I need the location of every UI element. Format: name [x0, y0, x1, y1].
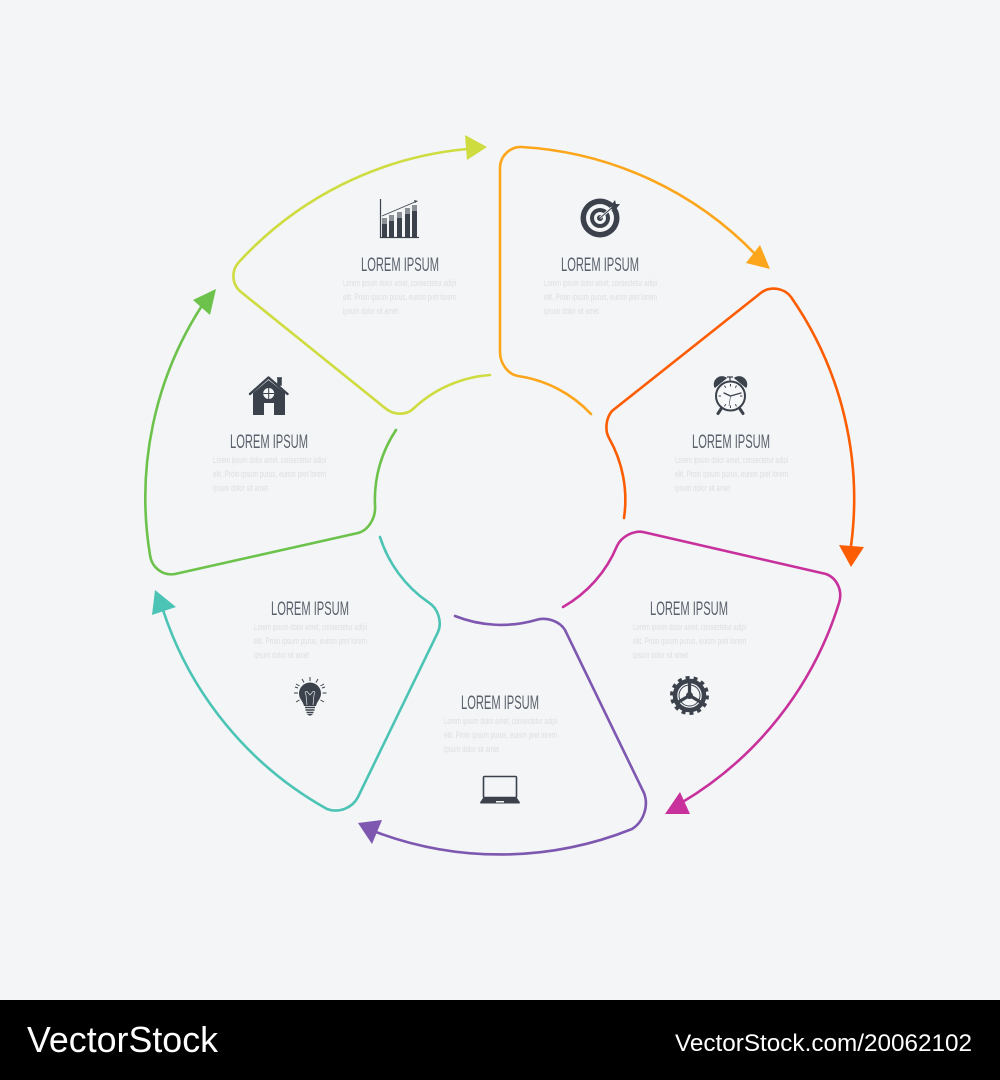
text block: purple: elit. Proin ipsum purus, euism pret lorem: [444, 730, 557, 741]
purple outline arrow: [376, 616, 646, 854]
text block: magenta: [633, 622, 746, 661]
panel: lime segment: [233, 135, 490, 414]
heading: orange: LOREM IPSUM: [561, 254, 639, 276]
text block: orange: ipsum dolor sit amet: [544, 306, 599, 317]
icon: alarm clock: [715, 377, 746, 414]
text block: teal: elit. Proin ipsum purus, euism pret lorem: [254, 636, 367, 647]
green arrowhead: [193, 289, 216, 315]
teal arrowhead: [152, 590, 176, 615]
panel: purple segment: [358, 616, 646, 854]
text block: lime: [343, 278, 456, 317]
panel: dark orange segment: [606, 289, 864, 567]
icon: target: [580, 198, 620, 238]
heading: lime: LOREM IPSUM: [361, 254, 439, 276]
panel: green segment: [145, 289, 396, 574]
icon: house: [250, 378, 288, 415]
icon: bar chart: [380, 199, 419, 238]
text block: green: [213, 455, 326, 494]
text block: magenta: elit. Proin ipsum purus, euism pret lorem: [633, 636, 746, 647]
dark orange outline arrow: [606, 289, 854, 546]
heading: green: LOREM IPSUM: [230, 431, 308, 453]
lime arrowhead: [465, 135, 487, 160]
heading: magenta: LOREM IPSUM: [650, 598, 728, 620]
heading: dark orange: LOREM IPSUM: [692, 431, 770, 453]
text block: purple: [444, 716, 557, 755]
text block: orange: Lorem ipsum dolor amet, consectetur adipi: [544, 278, 657, 289]
text block: green: elit. Proin ipsum purus, euism pret lorem: [213, 469, 326, 480]
watermark url text: VectorStock.com/20062102: [675, 1030, 972, 1057]
magenta outline arrow: [563, 532, 840, 803]
text block: purple: Lorem ipsum dolor amet, consectetur adipi: [444, 716, 557, 727]
text block: dark orange: ipsum dolor sit amet: [675, 483, 730, 494]
text block: lime: elit. Proin ipsum purus, euism pret lorem: [343, 292, 456, 303]
green outline arrow: [145, 304, 396, 574]
panel: teal segment: [152, 537, 440, 811]
lime outline arrow: [233, 149, 490, 414]
text block: lime: Lorem ipsum dolor amet, consectetur adipi: [343, 278, 456, 289]
text block: magenta: Lorem ipsum dolor amet, consectetur adipi: [633, 622, 746, 633]
icon: gear: [672, 678, 707, 713]
orange outline arrow: [500, 147, 757, 414]
orange arrowhead: [746, 245, 770, 269]
text block: lime: ipsum dolor sit amet: [343, 306, 398, 317]
text block: teal: [254, 622, 367, 661]
heading: purple: LOREM IPSUM: [461, 692, 539, 714]
icon: laptop: [480, 776, 520, 804]
text block: dark orange: [675, 455, 788, 494]
panel: orange segment: [500, 147, 770, 414]
text block: green: ipsum dolor sit amet: [213, 483, 268, 494]
text block: magenta: ipsum dolor sit amet: [633, 650, 688, 661]
text block: orange: [544, 278, 657, 317]
purple arrowhead: [358, 820, 382, 844]
text block: purple: ipsum dolor sit amet: [444, 744, 499, 755]
heading: teal: LOREM IPSUM: [271, 598, 349, 620]
text block: green: Lorem ipsum dolor amet, consectetur adipi: [213, 455, 326, 466]
text block: teal: Lorem ipsum dolor amet, consectetur adipi: [254, 622, 367, 633]
text block: dark orange: Lorem ipsum dolor amet, consectetur adipi: [675, 455, 788, 466]
footer: watermark bar: [0, 1000, 1000, 1080]
text block: orange: elit. Proin ipsum purus, euism pret lorem: [544, 292, 657, 303]
dark orange arrowhead: [839, 545, 864, 567]
text block: dark orange: elit. Proin ipsum purus, euism pret lorem: [675, 469, 788, 480]
magenta arrowhead: [665, 792, 690, 814]
icon: light bulb: [294, 677, 326, 716]
teal outline arrow: [163, 537, 440, 811]
text block: teal: ipsum dolor sit amet: [254, 650, 309, 661]
panel: magenta segment: [563, 532, 840, 814]
watermark logo text: VectorStock: [27, 1019, 219, 1060]
